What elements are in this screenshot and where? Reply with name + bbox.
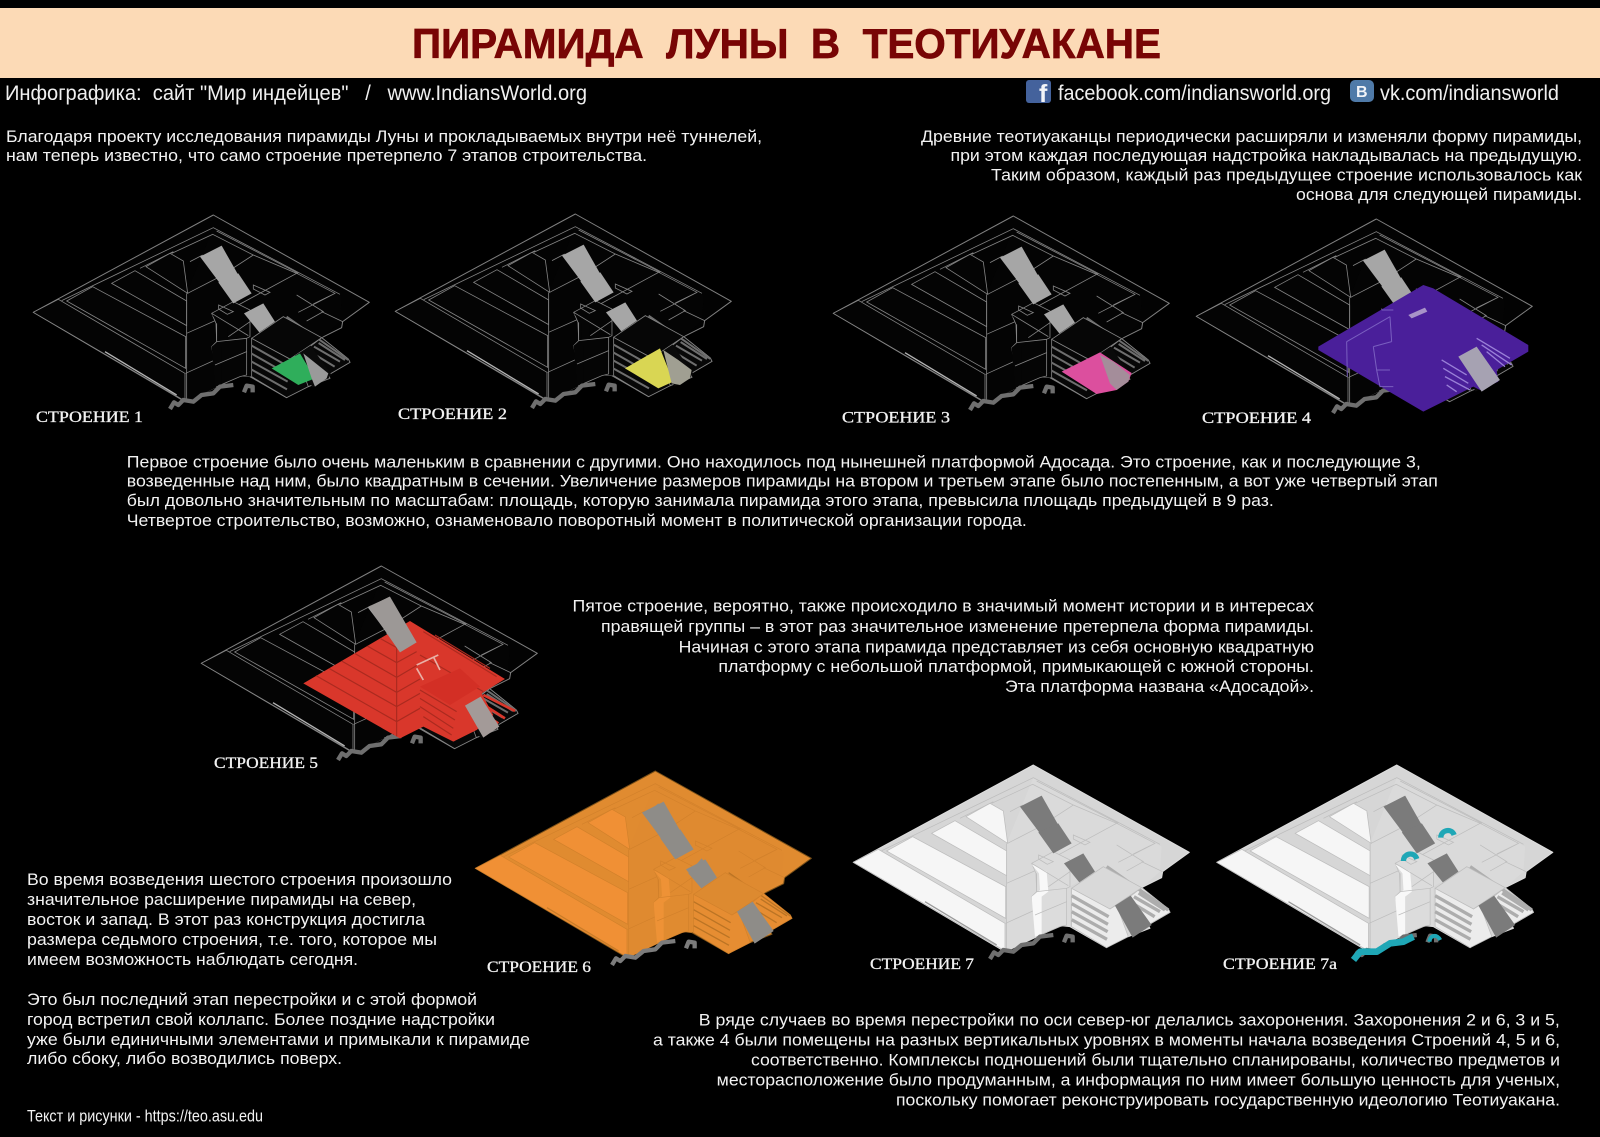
pyramid: structure 5 — [201, 566, 537, 760]
text: burials — [653, 1010, 1560, 1110]
pyramid: structure 6 — [475, 771, 811, 965]
label: structure 2: СТРОЕНИЕ 2 — [398, 406, 507, 423]
text: structures 1-4: возведенные над ним, было квадратным в сечении. Увеличение размеров пирамиды на втором и третьем этапе было постепенным, а вот уже четвертый этап — [127, 472, 1438, 491]
icon: facebook — [1026, 80, 1051, 108]
pyramid: structure 7a — [1217, 765, 1553, 960]
pyramid: structure 3 — [833, 216, 1169, 410]
facebook link: facebook.com/indiansworld.org — [1058, 82, 1331, 105]
text: structure 6: значительное расширение пирамиды на север, — [27, 890, 416, 909]
intro text right: при этом каждая последующая надстройка накладывалась на предыдущую. — [950, 146, 1582, 165]
text: structure 6: уже были единичными элементами и примыкали к пирамиде — [27, 1030, 530, 1049]
text: structure 6: размера седьмого строения, т.е. того, которое мы — [27, 930, 437, 949]
pyramid: structure 7 — [853, 765, 1189, 959]
icon: vk — [1350, 80, 1374, 102]
label: structure 1: СТРОЕНИЕ 1 — [36, 409, 143, 426]
vk link: vk.com/indiansworld — [1380, 82, 1559, 105]
intro text right: Древние теотиуаканцы периодически расширяли и изменяли форму пирамиды, — [921, 127, 1582, 146]
text: burials: а также 4 были помещены на разных вертикальных уровнях в моменты начала возведения Строений 4, 5 и 6, — [653, 1030, 1560, 1050]
pyramid: structure 1 — [33, 215, 369, 409]
intro text right: основа для следующей пирамиды. — [1296, 185, 1582, 204]
label: structure 7: СТРОЕНИЕ 7 — [870, 956, 974, 973]
text: structure 6: имеем возможность наблюдать сегодня. — [27, 950, 358, 969]
pyramid: structure 2 — [395, 214, 731, 408]
text: structure 6: либо сбоку, либо возводились поверх. — [27, 1049, 342, 1068]
text: structures 1-4 — [127, 453, 1438, 530]
text: structure 5: Начиная с этого этапа пирамида представляет из себя основную квадратную — [679, 638, 1314, 656]
text: structure 6: город встретил свой коллапс. Более поздние надстройки — [27, 1010, 495, 1029]
text: structure 6: восток и запад. В этот раз конструкция достигла — [27, 910, 426, 929]
title banner: ПИРАМИДА ЛУНЫ В ТЕОТИУАКАНЕ — [412, 20, 1161, 67]
text: structure 5 — [572, 597, 1315, 696]
title banner — [0, 8, 1600, 78]
text: burials: месторасположение было продуманным, а информация по ним имеет большую ценность для ученых, — [717, 1070, 1560, 1090]
text: structure 6: Это был последний этап перестройки и с этой формой — [27, 990, 477, 1009]
credit line: site: Инфографика: сайт "Мир индейцев" / www.IndiansWorld.org — [5, 82, 587, 105]
intro text left: нам теперь известно, что само строение претерпело 7 этапов строительства. — [6, 146, 647, 165]
text: structures 1-4: был довольно значительным по масштабам: площадь, которую занимала пирамида этого этапа, превысила площадь предыдущей в 9 раз. — [127, 491, 1274, 510]
text: structure 5: платформу с небольшой платформой, примыкающей с южной стороны. — [718, 657, 1314, 676]
source credit: Текст и рисунки - https://teo.asu.edu — [27, 1107, 263, 1126]
label: structure 4: СТРОЕНИЕ 4 — [1202, 410, 1311, 427]
label: structure 6: СТРОЕНИЕ 6 — [487, 959, 591, 976]
icon: vk: B — [1356, 84, 1368, 101]
pyramid: structure 4 — [1196, 219, 1532, 413]
text: structure 5: Пятое строение, вероятно, также происходило в значимый момент истории и в интересах — [572, 597, 1315, 616]
intro text right: Таким образом, каждый раз предыдущее строение использовалось как — [991, 166, 1583, 184]
text: structures 1-4: Четвертое строительство, возможно, ознаменовало поворотный момент в политической организации города. — [127, 511, 1027, 530]
intro text right — [921, 127, 1583, 204]
text: structure 6 — [27, 870, 530, 1068]
intro text left: Благодаря проекту исследования пирамиды Луны и прокладываемых внутри неё туннелей, — [6, 127, 762, 146]
text: structure 5: Эта платформа названа «Адосадой». — [1005, 677, 1314, 696]
label: structure 7a: СТРОЕНИЕ 7а — [1223, 956, 1337, 973]
text: burials: В ряде случаев во время перестройки по оси север-юг делались захоронения. Захоронения 2 и 6, 3 и 5, — [699, 1010, 1560, 1030]
text: structures 1-4: Первое строение было очень маленьким в сравнении с другими. Оно находилось под нынешней платформой Адосада. Это строение, как и последующие 3, — [127, 453, 1421, 472]
label: structure 3: СТРОЕНИЕ 3 — [842, 410, 950, 426]
text: structure 6: Во время возведения шестого строения произошло — [27, 870, 452, 889]
icon: facebook: f — [1039, 80, 1048, 108]
text: structure 5: правящей группы – в этот раз значительное изменение претерпела форма пирамиды. — [601, 617, 1314, 636]
text: burials: соответственно. Комплексы подношений были тщательно спланированы, количество предметов и — [751, 1050, 1560, 1070]
text: burials: поскольку помогает реконструировать государственную идеологию Теотиуакана. — [896, 1090, 1560, 1110]
intro text left — [6, 127, 762, 165]
label: structure 5: СТРОЕНИЕ 5 — [214, 755, 318, 772]
